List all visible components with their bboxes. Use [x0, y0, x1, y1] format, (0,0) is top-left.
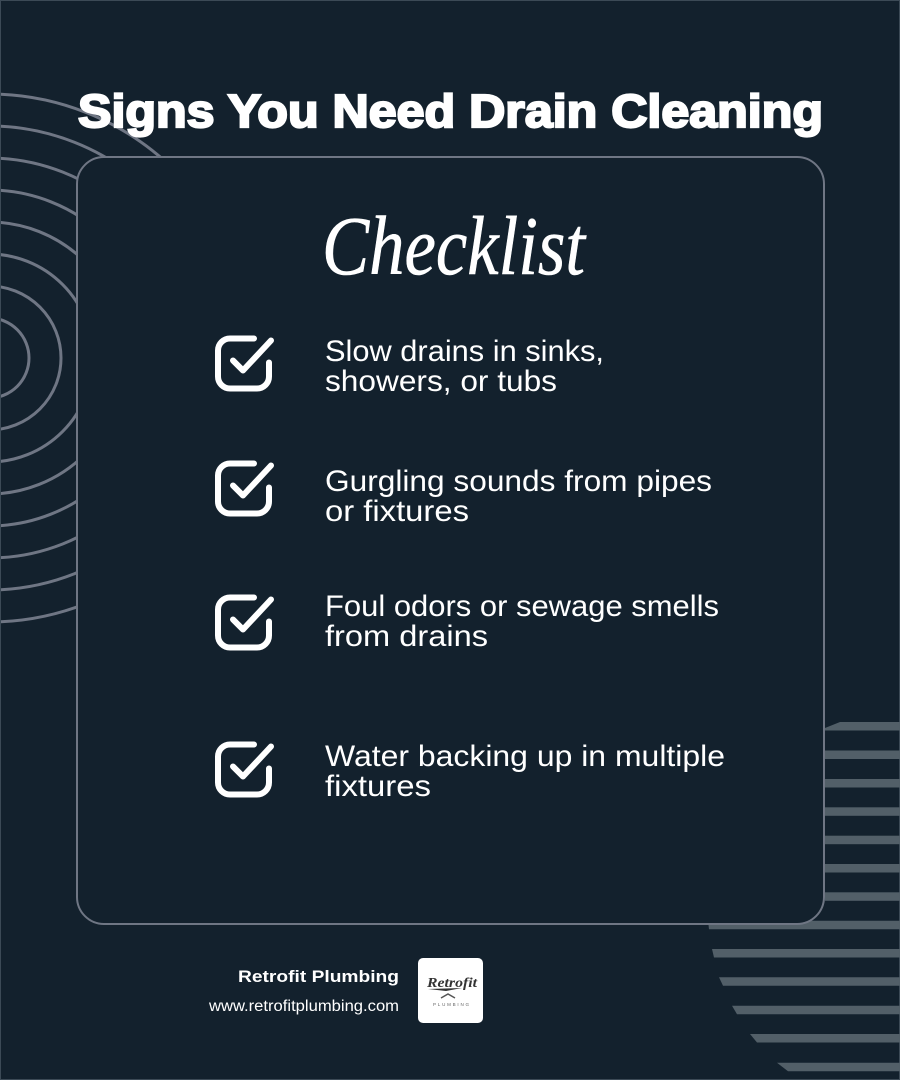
icon: checkbox 1: [218, 338, 271, 388]
text: item 3: [325, 590, 719, 653]
text: item 2: [325, 465, 712, 528]
logo: PLUMBING: [433, 1002, 469, 1007]
decorative concentric rings: [1, 92, 162, 624]
icon: checkbox 2: [218, 464, 271, 514]
icon: checkbox 4: [218, 744, 271, 794]
title: Signs You Need Drain Cleaning: [78, 85, 823, 137]
logo: [418, 958, 483, 1023]
footer: website: www.retrofitplumbing.com: [208, 998, 399, 1015]
text: item 3: from drains: [325, 620, 488, 653]
decorative stripes: [708, 722, 900, 1071]
heading: Checklist: Checklist: [322, 200, 587, 293]
text: item 1: showers, or tubs: [325, 365, 557, 398]
icon: checkbox 3: [218, 598, 271, 648]
text: item 2: Gurgling sounds from pipes: [325, 465, 712, 498]
text: item 4: [325, 740, 725, 803]
text: item 2: or fixtures: [325, 495, 469, 528]
text: item 4: Water backing up in multiple: [325, 740, 725, 773]
logo: Retrofit: [426, 976, 478, 991]
text: item 1: [325, 335, 604, 398]
footer: company name: Retrofit Plumbing: [238, 967, 399, 986]
panel: checklist card: [77, 157, 824, 924]
text: item 1: Slow drains in sinks,: [325, 335, 604, 368]
text: item 3: Foul odors or sewage smells: [325, 590, 719, 623]
text: item 4: fixtures: [325, 770, 431, 803]
